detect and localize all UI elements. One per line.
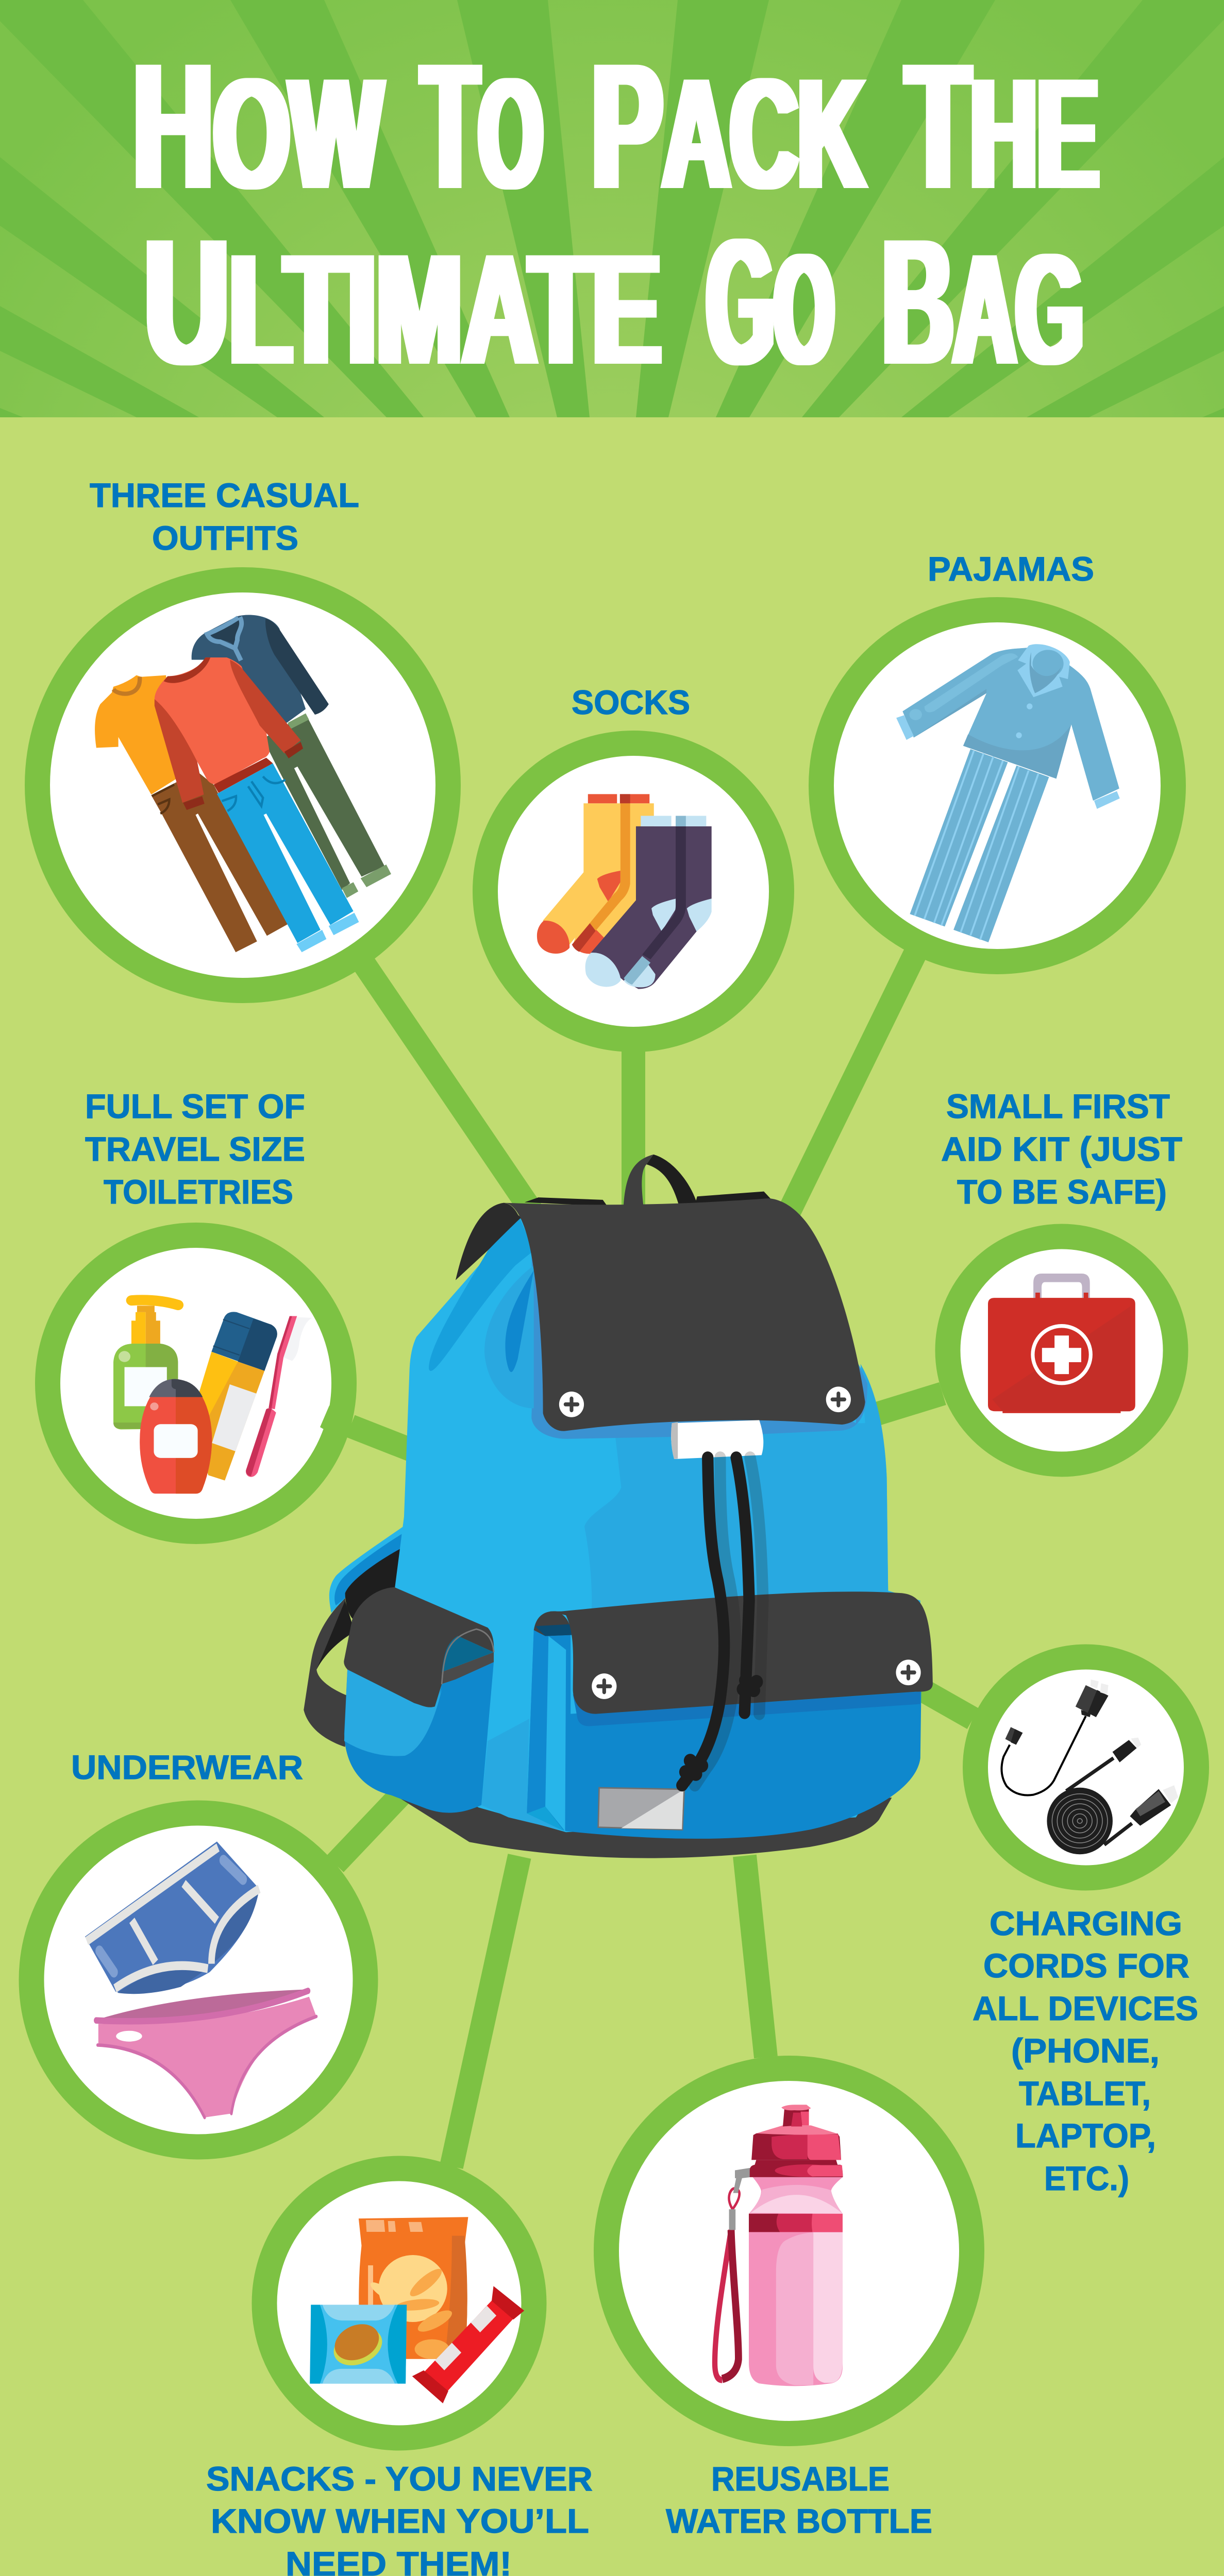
panel: three casual outfits: THREE CASUAL	[90, 476, 359, 514]
header sunburst banner	[0, 0, 1224, 417]
icon: socks	[537, 794, 712, 989]
panel: charging cords: LAPTOP,	[1015, 2116, 1156, 2155]
title: TO	[422, 26, 543, 226]
panel: reusable water bottle: WATER BOTTLE	[666, 2502, 932, 2540]
title: ULTIMATE	[144, 201, 661, 402]
title: THE	[906, 26, 1099, 226]
panel: first aid kit: TO BE SAFE)	[957, 1173, 1167, 1211]
icon: water bottle	[715, 2105, 843, 2386]
icon: snacks	[310, 2217, 524, 2403]
panel: reusable water bottle	[606, 1856, 972, 2540]
panel: three casual outfits	[37, 476, 539, 1221]
panel: pajamas	[778, 550, 1173, 1234]
icon: toiletries	[113, 1300, 312, 1494]
panel: charging cords: ETC.)	[1044, 2159, 1129, 2197]
backpack illustration	[304, 1155, 933, 1858]
panel: socks	[485, 683, 781, 1221]
icon: underwear	[85, 1841, 316, 2117]
panel: first aid kit: AID KIT (JUST	[941, 1130, 1182, 1168]
panel: underwear: UNDERWEAR	[71, 1748, 303, 1786]
panel: charging cords: CHARGING	[990, 1904, 1182, 1942]
panel: toiletries: TOILETRIES	[104, 1173, 293, 1211]
title: BAG	[882, 201, 1083, 402]
panel: snacks: KNOW WHEN YOU’LL	[211, 2502, 589, 2540]
panel: charging cords: ALL DEVICES	[973, 1989, 1198, 2027]
panel: reusable water bottle: REUSABLE	[711, 2460, 890, 2498]
panel: pajamas: PAJAMAS	[928, 550, 1094, 588]
panel: toiletries	[47, 1087, 423, 1531]
panel: toiletries: FULL SET OF	[85, 1087, 305, 1125]
title: HOW	[133, 26, 383, 226]
panel: snacks	[206, 1856, 593, 2576]
panel: first aid kit: SMALL FIRST	[946, 1087, 1170, 1125]
icon: pajamas	[896, 644, 1120, 942]
panel: charging cords	[912, 1657, 1198, 2197]
panel: charging cords: (PHONE,	[1011, 2031, 1160, 2070]
panel: first aid kit	[866, 1087, 1182, 1464]
panel: three casual outfits: OUTFITS	[152, 519, 298, 557]
panel: socks: SOCKS	[572, 683, 690, 721]
panel: toiletries: TRAVEL SIZE	[85, 1130, 305, 1168]
title	[133, 26, 1099, 402]
panel: charging cords: CORDS FOR	[983, 1946, 1189, 1985]
panel: underwear	[31, 1748, 412, 2147]
icon: first aid kit	[988, 1274, 1135, 1413]
icon: charging cords	[1001, 1680, 1178, 1854]
icon: outfits	[95, 615, 391, 952]
panel: charging cords: TABLET,	[1019, 2074, 1151, 2112]
title: PACK	[592, 26, 865, 226]
title: GO	[707, 201, 834, 402]
panel: snacks: SNACKS - YOU NEVER	[206, 2460, 593, 2498]
